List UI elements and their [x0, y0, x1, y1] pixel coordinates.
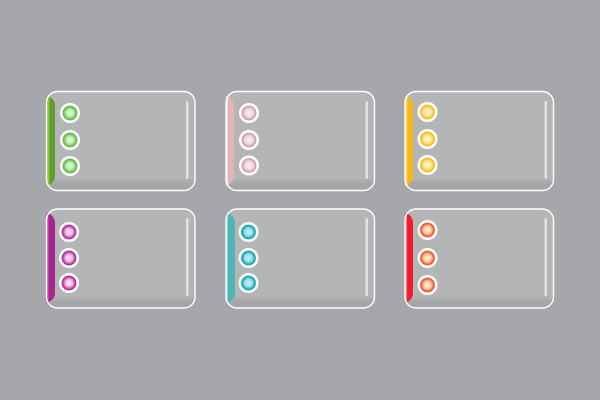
- panel: green card: [46, 92, 195, 190]
- panel: magenta card: [46, 209, 195, 308]
- icon: red bullets: [419, 221, 436, 294]
- icon: teal bullets: [240, 223, 257, 292]
- panel: red card: [405, 209, 554, 308]
- icon: green bullets: [61, 104, 79, 175]
- icon: pink bullets: [240, 104, 258, 174]
- panel: yellow card: [405, 92, 554, 190]
- icon: yellow bullets: [419, 103, 436, 174]
- panel: teal card: [226, 209, 374, 308]
- icon: magenta bullets: [60, 223, 78, 292]
- panel: pink card: [226, 92, 374, 190]
